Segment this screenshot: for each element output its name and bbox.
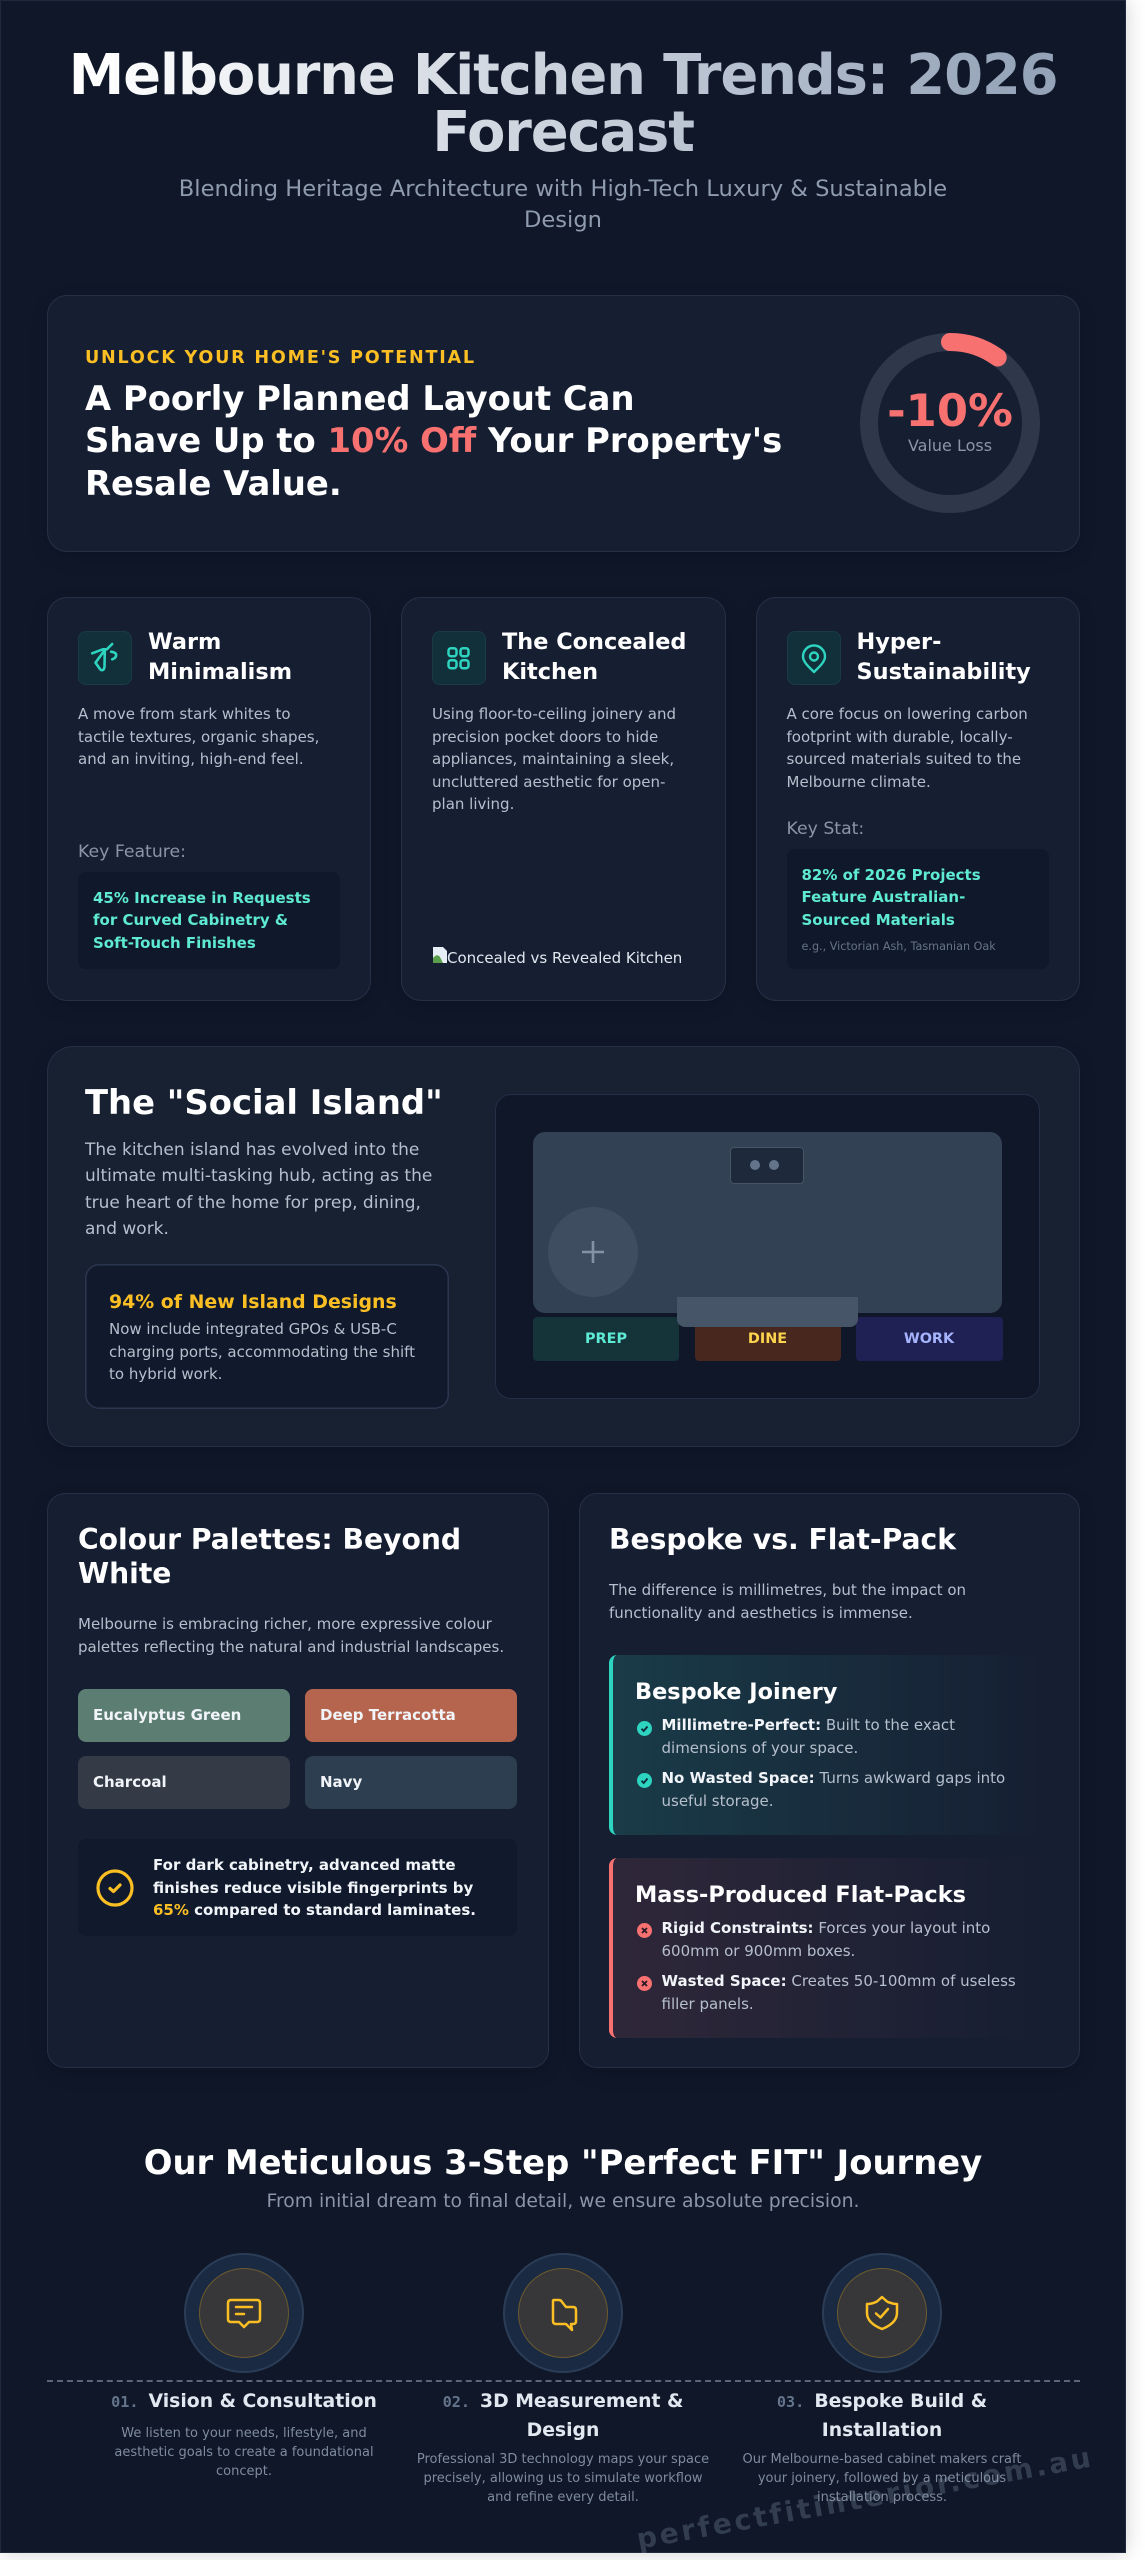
tag: dine	[694, 1317, 840, 1361]
description	[78, 1615, 504, 1656]
icon: check circle	[96, 1869, 134, 1907]
step 1 description	[114, 2426, 374, 2479]
heading	[78, 1523, 461, 1590]
step 3 icon	[822, 2253, 942, 2373]
heading: Minimalism	[148, 658, 292, 684]
stat text: to hybrid work.	[109, 1365, 222, 1383]
stat text	[109, 1320, 415, 1383]
description: true heart of the home for prep, dining,	[85, 1193, 421, 1213]
callout text: finishes reduce visible fingerprints by	[153, 1878, 473, 1896]
swatch: charcoal	[78, 1756, 290, 1809]
heading: Kitchen	[502, 658, 598, 684]
donut chart: value loss: Value Loss	[908, 436, 992, 455]
broken image with alt text: Concealed vs Revealed Kitchen	[447, 949, 682, 967]
step 3 description: installation process.	[817, 2490, 947, 2505]
check icon	[637, 1773, 652, 1788]
title: Forecast	[432, 100, 694, 165]
subtitle: Design	[524, 207, 602, 233]
swatch: eucalyptus green: Eucalyptus Green	[93, 1706, 241, 1724]
key feature callout: Soft-Touch Finishes	[93, 934, 256, 952]
description: A move from stark whites to	[78, 705, 291, 723]
point: wasted space	[662, 1972, 1016, 2012]
key feature callout: 45% Increase in Requests	[93, 889, 311, 907]
description: Melbourne climate.	[786, 772, 931, 790]
hero heading: A Poorly Planned Layout Can	[85, 379, 635, 418]
donut chart: value loss: -10%	[887, 384, 1013, 437]
description: footprint with durable, locally-	[786, 728, 1013, 746]
point: no wasted space: No Wasted Space: Turns awkward gaps into	[662, 1769, 1005, 1787]
description: Using floor-to-ceiling joinery and	[432, 705, 676, 723]
description: ultimate multi-tasking hub, acting as the	[85, 1166, 432, 1186]
key stat callout	[786, 849, 1048, 969]
island top	[533, 1132, 1002, 1313]
description: functionality and aesthetics is immense.	[609, 1604, 913, 1622]
panel: hyper-sustainability	[756, 597, 1080, 1001]
swatch: deep terracotta: Deep Terracotta	[320, 1706, 456, 1724]
key stat callout: e.g., Victorian Ash, Tasmanian Oak	[802, 940, 996, 953]
point: rigid constraints: Rigid Constraints: Forces your layout into	[662, 1919, 990, 1937]
panel: bespoke vs flat-pack	[578, 1493, 1080, 2068]
callout text: 65% compared to standard laminates.	[153, 1901, 476, 1919]
point: no wasted space: useful storage.	[662, 1792, 774, 1810]
description: palettes reflecting the natural and industrial landscapes.	[78, 1638, 504, 1656]
tag: work	[856, 1317, 1002, 1361]
watermark: perfectfitinterior.com.au	[634, 2440, 1096, 2553]
point: rigid constraints	[662, 1919, 990, 1960]
hero heading: Shave Up to 10% Off Your Property's	[85, 421, 782, 460]
step 3 description	[743, 2452, 1022, 2505]
key feature callout	[78, 872, 340, 969]
check icon	[637, 1721, 652, 1736]
stat text: Now include integrated GPOs & USB-C	[109, 1320, 397, 1338]
hero heading: Resale Value.	[85, 464, 342, 503]
tag: prep: PREP	[585, 1331, 627, 1347]
key feature callout: for Curved Cabinetry &	[93, 911, 288, 929]
island overhang	[676, 1297, 858, 1327]
tag: prep	[533, 1317, 679, 1361]
icon: warm minimalism	[78, 631, 132, 685]
heading: White	[78, 1557, 171, 1590]
stat callout	[85, 1264, 449, 1409]
panel: concealed kitchen	[401, 597, 726, 1001]
callout text: For dark cabinetry, advanced matte	[153, 1856, 456, 1874]
dashed timeline	[47, 2380, 1080, 2382]
journey subtitle: From initial dream to final detail, we ensure absolute precision.	[267, 2191, 859, 2212]
icon: grid	[432, 631, 486, 685]
heading	[502, 629, 686, 684]
point: millimetre-perfect: dimensions of your space.	[662, 1738, 858, 1756]
tag: dine: DINE	[748, 1331, 787, 1347]
step 2 title: 02. 3D Measurement &	[443, 2391, 683, 2412]
comparison: bespoke joinery: Bespoke Joinery	[635, 1679, 837, 1705]
swatch: charcoal: Charcoal	[93, 1773, 167, 1791]
title	[0, 47, 1126, 161]
comparison: flat-packs	[609, 1858, 1048, 2038]
heading: Warm	[148, 629, 221, 655]
swatch: navy: Navy	[320, 1773, 362, 1791]
step 3 title: 03. Bespoke Build &	[777, 2391, 987, 2412]
icon: location pin	[786, 631, 840, 685]
description: A core focus on lowering carbon	[786, 705, 1028, 723]
heading: Colour Palettes: Beyond	[78, 1523, 461, 1556]
step 1 description: concept.	[216, 2464, 272, 2479]
description: and an inviting, high-end feel.	[78, 750, 304, 768]
stat heading: 94% of New Island Designs	[109, 1291, 397, 1313]
swatch: eucalyptus green	[78, 1689, 290, 1742]
description: plan living.	[432, 795, 514, 813]
step 3 title: Installation	[822, 2420, 942, 2440]
step 2 description: precisely, allowing us to simulate workflow	[423, 2471, 703, 2486]
heading: Hyper-	[856, 629, 941, 655]
power outlet	[730, 1147, 804, 1184]
description	[84, 1140, 432, 1239]
hero heading	[85, 379, 782, 503]
panel: social island	[47, 1046, 1080, 1447]
subtitle: Blending Heritage Architecture with High-Tech Luxury & Sustainable	[179, 176, 947, 202]
donut chart: value loss	[860, 333, 1040, 513]
description	[608, 1581, 966, 1622]
swatch: navy	[305, 1756, 517, 1809]
step 2 icon	[503, 2253, 623, 2373]
diagram: island	[495, 1094, 1040, 1399]
swatch: deep terracotta	[305, 1689, 517, 1742]
fingerprint callout	[78, 1839, 517, 1936]
description: The difference is millimetres, but the impact on	[609, 1581, 966, 1599]
heading: Bespoke vs. Flat-Pack	[609, 1523, 956, 1556]
heading: The Concealed	[502, 629, 686, 655]
heading	[856, 629, 1031, 684]
key stat callout: 82% of 2026 Projects	[802, 866, 981, 884]
journey heading: Our Meticulous 3-Step "Perfect FIT" Journey	[144, 2143, 982, 2182]
kicker: UNLOCK YOUR HOME'S POTENTIAL	[85, 348, 476, 368]
comparison: flat-packs: Mass-Produced Flat-Packs	[635, 1882, 966, 1908]
description: The kitchen island has evolved into the	[85, 1140, 419, 1160]
step 1 description: We listen to your needs, lifestyle, and	[121, 2426, 367, 2441]
description	[786, 705, 1028, 790]
sink circle	[548, 1207, 638, 1297]
panel: value loss hero	[47, 295, 1080, 552]
description: precision pocket doors to hide	[432, 728, 658, 746]
heading: Sustainability	[856, 658, 1031, 684]
step 1 icon	[184, 2253, 304, 2373]
cross icon	[637, 1976, 652, 1991]
point: millimetre-perfect: Millimetre-Perfect: Built to the exact	[662, 1716, 955, 1734]
panel: warm minimalism	[47, 597, 371, 1001]
step 2 description	[417, 2452, 709, 2505]
key stat callout: Sourced Materials	[802, 911, 955, 929]
step 3 description: your joinery, followed by a meticulous	[758, 2471, 1006, 2486]
point: rigid constraints: 600mm or 900mm boxes.	[662, 1942, 855, 1960]
step 1 description: aesthetic goals to create a foundational	[114, 2445, 374, 2460]
step 2 description: and refine every detail.	[487, 2490, 639, 2505]
description: uncluttered aesthetic for open-	[432, 772, 665, 790]
step 2 description: Professional 3D technology maps your space	[417, 2452, 709, 2467]
comparison: bespoke joinery	[609, 1655, 1048, 1835]
description: sourced materials suited to the	[786, 750, 1021, 768]
point: wasted space: Wasted Space: Creates 50-100mm of useless	[662, 1972, 1016, 1990]
heading	[148, 629, 292, 684]
key feature label: Key Feature:	[78, 842, 186, 862]
description: and work.	[85, 1219, 169, 1239]
key stat callout: Feature Australian-	[802, 888, 965, 906]
description: tactile textures, organic shapes,	[78, 728, 319, 746]
point: millimetre-perfect	[662, 1716, 955, 1756]
point: wasted space: filler panels.	[662, 1994, 754, 2012]
step 1 title: 01. Vision & Consultation	[111, 2391, 377, 2412]
description	[432, 705, 676, 813]
title: Melbourne Kitchen Trends: 2026	[69, 43, 1057, 108]
heading: The "Social Island"	[85, 1083, 443, 1122]
tag: work: WORK	[904, 1331, 954, 1347]
key stat label: Key Stat:	[786, 819, 864, 839]
step 2 title: Design	[527, 2420, 599, 2440]
point: no wasted space	[662, 1769, 1005, 1810]
stat text: charging ports, accommodating the shift	[109, 1342, 415, 1360]
description	[78, 705, 319, 768]
callout text	[153, 1856, 476, 1919]
step 3 title	[777, 2391, 987, 2440]
description: Melbourne is embracing richer, more expressive colour	[78, 1615, 492, 1633]
cross icon	[637, 1923, 652, 1938]
subtitle	[179, 176, 947, 233]
panel: colour palettes	[47, 1493, 548, 2068]
step 3 description: Our Melbourne-based cabinet makers craft	[743, 2452, 1021, 2467]
step 2 title	[443, 2391, 683, 2440]
description: appliances, maintaining a sleek,	[432, 750, 674, 768]
